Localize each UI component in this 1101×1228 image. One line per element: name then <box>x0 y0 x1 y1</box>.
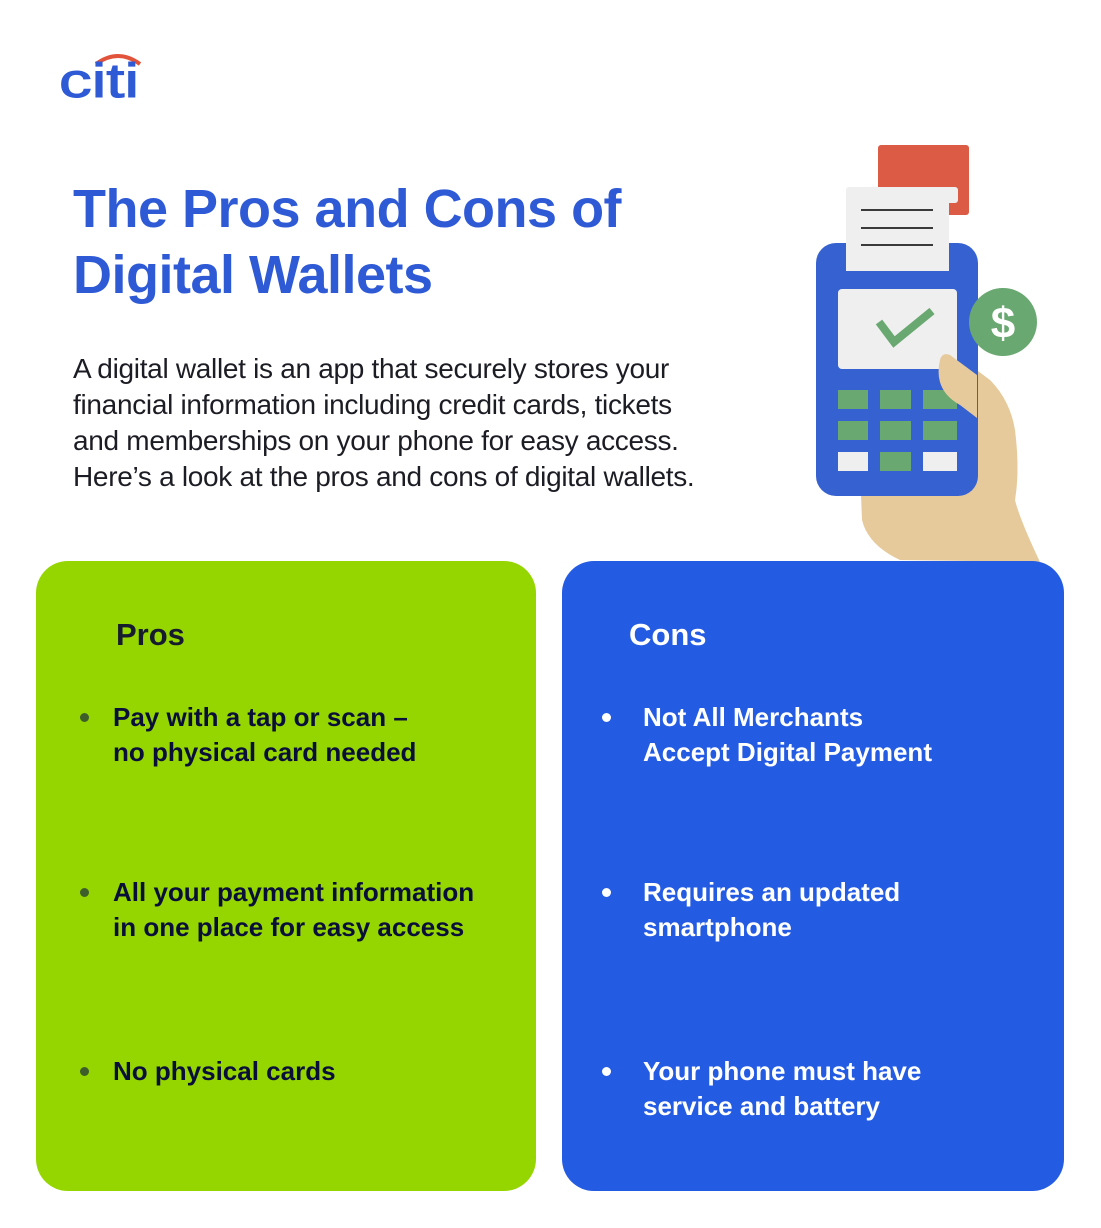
title <box>73 179 622 305</box>
red card <box>878 145 969 215</box>
cons item 3 <box>602 1056 921 1121</box>
terminal <box>816 243 978 496</box>
intro text: and memberships on your phone for easy access. <box>73 425 679 456</box>
pros item 1 <box>80 702 416 767</box>
pros item 1: Pay with a tap or scan – <box>113 702 408 732</box>
thumb <box>939 354 977 418</box>
cons item 2: Requires an updated <box>643 877 900 907</box>
intro text: Here’s a look at the pros and cons of digital wallets. <box>73 461 694 492</box>
panel: cons <box>562 561 1064 1191</box>
hand body <box>860 349 1040 562</box>
intro text: A digital wallet is an app that securely stores your <box>73 353 669 384</box>
pros item 2: All your payment information <box>113 877 474 907</box>
cons item 1: Not All Merchants <box>643 702 863 732</box>
pros heading: Pros <box>116 617 185 652</box>
illustration: payment terminal in hand <box>816 145 1040 562</box>
cons item 1 <box>602 702 932 767</box>
illustration: payment terminal in hand: $ <box>991 299 1015 348</box>
receipt <box>846 187 958 203</box>
cons item 3: service and battery <box>643 1091 880 1121</box>
dollar coin <box>969 288 1037 356</box>
title: The Pros and Cons of <box>73 179 621 239</box>
title: Digital Wallets <box>73 245 433 305</box>
cons item 1: Accept Digital Payment <box>643 737 932 767</box>
logo: citi <box>59 54 142 100</box>
panel: pros <box>36 561 536 1191</box>
cons item 2: smartphone <box>643 912 792 942</box>
cons heading: Cons <box>629 617 706 652</box>
intro text: financial information including credit cards, tickets <box>73 389 672 420</box>
pros item 2 <box>80 877 474 942</box>
pros item 2: in one place for easy access <box>113 912 464 942</box>
intro text <box>73 353 694 492</box>
cons item 3: Your phone must have <box>643 1056 921 1086</box>
cons item 2 <box>602 877 900 942</box>
pros item 1: no physical card needed <box>113 737 416 767</box>
pros item 3: No physical cards <box>113 1056 336 1086</box>
